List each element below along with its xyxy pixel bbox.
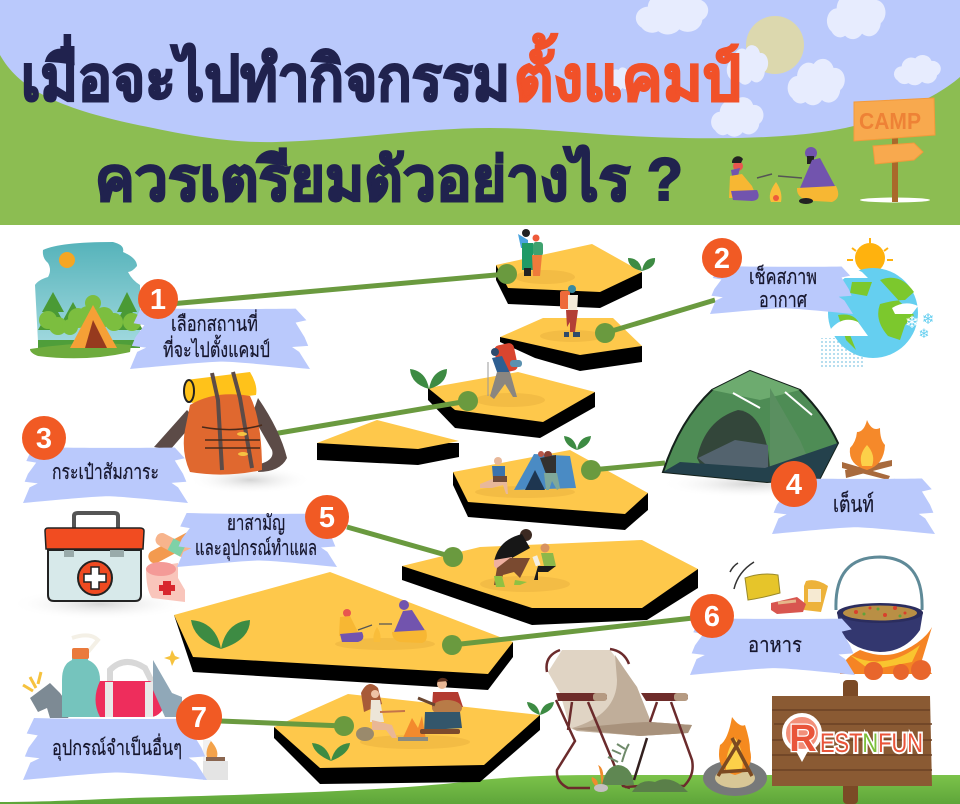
- icon: green tent: [660, 371, 840, 498]
- label 5: และอุปกรณ์ทำแผล: [195, 536, 317, 561]
- platform small: [317, 420, 459, 465]
- title line 1: [21, 33, 741, 114]
- icon: campfire: [842, 420, 892, 480]
- people: couple: [518, 229, 543, 276]
- icon: cooking pot: [836, 557, 932, 680]
- platform 6: [174, 572, 513, 690]
- badge 3: 3: [36, 423, 52, 455]
- label 3: กระเป๋าสัมภาระ: [52, 461, 159, 484]
- title line 1: ตั้งแคมป์: [514, 33, 741, 114]
- ribbon 5: [177, 512, 337, 567]
- icon: earth and weather: [820, 238, 934, 368]
- label 2: [749, 263, 817, 312]
- label 4: เต็นท์: [833, 489, 874, 517]
- connector lines: [170, 264, 715, 736]
- people: treating wound: [494, 529, 556, 587]
- header background: [0, 0, 960, 225]
- label 1: เลือกสถานที่: [171, 309, 258, 336]
- badge 5: 5: [319, 502, 335, 534]
- platform 7: [274, 694, 540, 784]
- label 5: [195, 512, 317, 561]
- platform shadows: [335, 270, 604, 749]
- ribbon 1: [130, 308, 310, 369]
- badge 6: 6: [704, 601, 720, 633]
- icon: backpack: [154, 372, 312, 494]
- title line 2: ควรเตรียมตัวอย่างไร ?: [95, 144, 683, 213]
- label 2: อากาศ: [759, 289, 808, 312]
- icon: wooden logo sign: [772, 680, 932, 804]
- badge 4: 4: [786, 469, 802, 501]
- icon: camp sign: CAMP: [859, 108, 921, 134]
- badge 3: [22, 416, 66, 460]
- badge 7: [176, 694, 222, 740]
- badge 2: [702, 238, 742, 278]
- icon: camping gear: [23, 635, 228, 780]
- label 5: ยาสามัญ: [227, 512, 285, 535]
- people: hiker: [488, 342, 522, 399]
- icon: wooden logo sign: ESTNFUN: [820, 728, 923, 758]
- icon: earth and weather: ❄: [919, 326, 929, 341]
- ribbon 2: [710, 263, 853, 314]
- platform 5: [402, 540, 698, 625]
- icon: chair: [547, 649, 693, 788]
- platform 3: [428, 372, 595, 438]
- ribbon 3: [23, 447, 188, 503]
- badge 5: [305, 495, 349, 539]
- platform 4: [453, 450, 648, 530]
- ribbon 6: [690, 618, 855, 675]
- sprouts: [191, 258, 655, 761]
- label 1: [163, 309, 270, 362]
- ground: [0, 775, 960, 804]
- badge 7: 7: [191, 702, 207, 734]
- badge 4: [771, 461, 817, 507]
- ribbon 4: [772, 478, 935, 534]
- icon: log fire: [703, 717, 767, 796]
- icon: campers around fire: [729, 147, 838, 204]
- icon: camp sign: [854, 98, 935, 202]
- people: guitar and fire: [356, 678, 463, 741]
- icon: first aid kit: [10, 513, 190, 620]
- people: campers on platform 6: [339, 600, 427, 643]
- icon: plants: [592, 744, 688, 792]
- ribbon 7: [23, 718, 207, 780]
- platform 1: [496, 244, 642, 308]
- platform 2: [500, 318, 642, 371]
- icon: bandages: [146, 529, 200, 602]
- badge 1: 1: [150, 284, 166, 316]
- icon: wooden logo sign: R: [789, 718, 817, 760]
- icon: earth and weather: ❄: [922, 311, 934, 328]
- badge 6: [690, 594, 734, 638]
- clouds and sun: [606, 0, 941, 137]
- icon: forest tent scene: [30, 242, 143, 358]
- label 6: อาหาร: [748, 634, 802, 657]
- label 7: อุปกรณ์จำเป็นอื่นๆ: [52, 733, 182, 761]
- label 2: เช็คสภาพ: [749, 263, 817, 289]
- label 1: ที่จะไปตั้งแคมป์: [163, 335, 270, 362]
- badge 2: 2: [714, 243, 730, 275]
- icon: earth and weather: ❄: [905, 313, 919, 332]
- people: photographer: [560, 285, 580, 337]
- people: pitching tent: [480, 451, 576, 494]
- icon: canned food: [730, 562, 828, 614]
- title line 1: เมื่อจะไปทำกิจกรรม: [21, 35, 510, 114]
- badge 1: [138, 279, 178, 319]
